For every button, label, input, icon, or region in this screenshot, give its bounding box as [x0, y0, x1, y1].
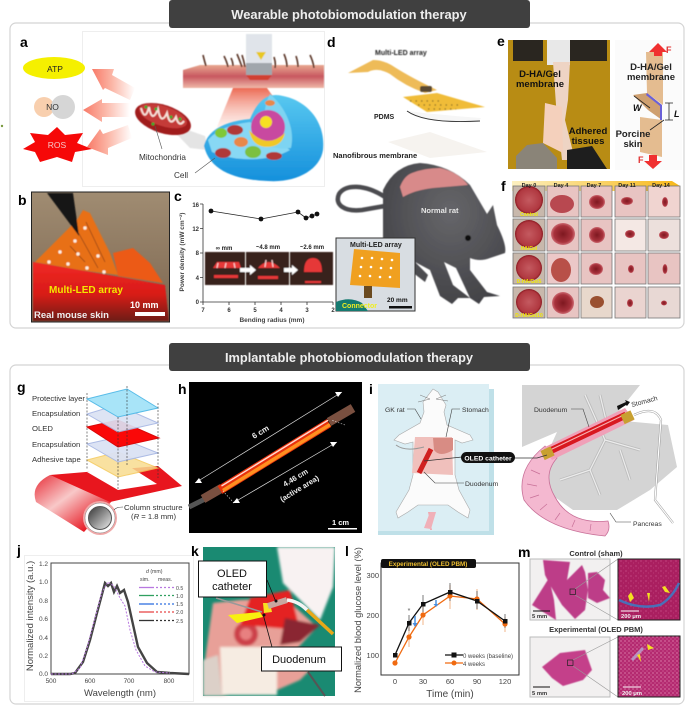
- chart: glucose: *: [408, 608, 411, 615]
- chart: spectrum: 1.0: [39, 579, 48, 586]
- legend: 4 weeks: [463, 662, 485, 668]
- callout: OLED catheter: OLED: [217, 568, 247, 580]
- photo: OLED catheter: (active area): [278, 473, 321, 504]
- legend: meas.: [158, 577, 172, 583]
- OLED layer diagram: [32, 386, 183, 535]
- panel label a: a: [20, 34, 28, 50]
- upper encapsulation: [87, 405, 158, 432]
- label: mitochondria: [139, 126, 186, 162]
- chart: spectrum: Normalized intensity (a.u.): [25, 561, 36, 671]
- chart: spectrum: 700: [124, 678, 135, 685]
- diagram e: membrane: [627, 72, 675, 83]
- duodenum illustration: [522, 385, 677, 536]
- lower encapsulation: [87, 437, 158, 462]
- chart: power density: ~4.8 mm: [256, 245, 280, 251]
- PDMS layer: [374, 111, 481, 122]
- wound photo grid: Day 0: [522, 183, 536, 189]
- panel label e: e: [497, 33, 505, 49]
- icon: ATP: [23, 57, 85, 79]
- chart: power density: Power density (mW cm⁻²): [179, 213, 186, 291]
- panel label h: h: [178, 381, 187, 397]
- title bar: implantable: Implantable photobiomodulation therapy: [225, 350, 474, 365]
- banner: Experimental (OLED PBM): [389, 561, 467, 568]
- chart: glucose: 100: [366, 651, 379, 660]
- chart: glucose: 90: [473, 677, 481, 686]
- chart: spectrum: 0.8: [39, 598, 48, 605]
- diagram e: D-HA/Gel: [630, 62, 672, 73]
- legend: 1.5: [176, 602, 183, 608]
- title bar: implantable: [169, 343, 530, 371]
- icon: ATP: ATP: [47, 64, 63, 74]
- chart: spectrum: 500: [46, 678, 57, 685]
- photo: surgery: [198, 547, 342, 696]
- panel label m: m: [518, 544, 530, 560]
- skin and light source: [183, 34, 324, 135]
- wound photo grid: Day 14: [652, 183, 671, 189]
- chart: glucose: 60: [446, 677, 454, 686]
- icon: cell: [165, 94, 323, 181]
- OLED layer diagram: Encapsulation: [32, 440, 80, 449]
- chart: glucose: Time (min): [426, 689, 474, 700]
- chart: power density: 16: [192, 203, 200, 209]
- photo: OLED catheter: 4.46 cm: [281, 467, 310, 489]
- histology panels: 200 μm: [621, 614, 641, 620]
- photo e: tissues: [572, 136, 604, 147]
- chart: spectrum: 0.0: [39, 671, 48, 678]
- chart: glucose: 0: [393, 677, 397, 686]
- duodenum illustration: Duodenum: [534, 407, 568, 414]
- labels: rat: Duodenum: [465, 481, 499, 488]
- diagram e: L: [674, 109, 680, 119]
- icon: ROS: ROS: [48, 140, 67, 150]
- wound photo grid: Day 4: [554, 183, 569, 189]
- chart: power density: 3: [305, 308, 309, 314]
- chart: power density: 2: [331, 308, 335, 314]
- icon: ROS: [23, 127, 92, 162]
- chart: spectrum: 0.2: [39, 653, 48, 660]
- experimental heading: Experimental (OLED PBM): [549, 625, 643, 634]
- panel label b: b: [18, 192, 27, 208]
- wound photo grid: D-HA/Gel5: [517, 279, 542, 285]
- chart: power density: 4: [196, 276, 200, 282]
- scale bar: 10 mm: [130, 300, 159, 310]
- diagram e: W: [633, 103, 643, 113]
- chart: power density: 6: [227, 308, 231, 314]
- histology panels: 5 mm: [532, 614, 547, 620]
- panel label i: i: [369, 381, 373, 397]
- chart: power density: 4: [279, 308, 283, 314]
- chart: power density: 0: [196, 300, 200, 306]
- callout: OLED catheter: [424, 452, 547, 463]
- panel label g: g: [17, 379, 26, 395]
- inset: multi-LED array: [336, 238, 415, 311]
- chart: glucose: Normalized blood glucose level (%): [353, 547, 363, 693]
- callout: OLED catheter: catheter: [212, 581, 252, 593]
- callout: OLED catheter: OLED catheter: [464, 456, 512, 462]
- chart: power density: 8: [196, 251, 200, 257]
- arrows to outcomes: [83, 69, 135, 155]
- legend: [445, 652, 513, 668]
- label: mitochondria: Mitochondria: [139, 153, 186, 162]
- text: normal rat: Normal rat: [421, 206, 459, 215]
- chart: glucose: 120: [499, 677, 511, 686]
- rat abdomen illustration: [378, 384, 499, 535]
- inset photos: [205, 252, 333, 285]
- scale bar: [328, 518, 357, 530]
- OLED layer: [87, 420, 159, 447]
- scale bar: 20 mm: [387, 297, 408, 304]
- histology panels: 5 mm: [532, 691, 547, 697]
- scale bar: 1 cm: [332, 518, 349, 527]
- legend: 2.5: [176, 619, 183, 625]
- label: column structure: Column structure: [124, 503, 183, 512]
- panel label f: f: [501, 178, 506, 194]
- chart: glucose: 30: [419, 677, 427, 686]
- photo e: Adhered: [569, 126, 607, 137]
- control heading: Control (sham): [569, 549, 623, 558]
- panel: wearable therapy: [10, 23, 684, 328]
- panel label c: c: [174, 188, 182, 204]
- callout: duodenum: Duodenum: [272, 654, 326, 666]
- title bar: wearable: Wearable photobiomodulation therapy: [231, 7, 468, 22]
- decorative dot: [1, 125, 3, 127]
- legend: d (mm): [146, 569, 163, 575]
- chart: power density: ∞ mm: [216, 246, 232, 252]
- protective layer: [87, 389, 158, 417]
- label: cell: Cell: [174, 171, 188, 180]
- OLED layer diagram: OLED: [32, 424, 53, 433]
- nanofibrous membrane: [333, 132, 487, 160]
- legend: 0.5: [176, 586, 183, 592]
- chart: power density: 12: [192, 227, 200, 233]
- icon: NO: [34, 95, 75, 119]
- legend: 1.0: [176, 594, 183, 600]
- chart: power density: 7: [201, 308, 205, 314]
- diagram e: skin: [623, 139, 643, 150]
- chart: spectrum: 0.6: [39, 616, 48, 623]
- nanofibrous membrane: Nanofibrous membrane: [333, 151, 417, 160]
- chart: power density: 5: [253, 308, 257, 314]
- chart: power density: ~2.6 mm: [300, 245, 324, 251]
- label: cell: [174, 158, 215, 180]
- wound photo grid: [512, 181, 680, 319]
- photo: OLED catheter: [189, 382, 362, 533]
- text: Multi-LED array: Multi-LED array: [49, 285, 123, 296]
- OLED layer diagram: Encapsulation: [32, 409, 80, 418]
- chart: spectrum: 800: [164, 678, 175, 685]
- chart: spectrum: 0.4: [39, 635, 48, 642]
- icon: mitochondria: [131, 97, 195, 141]
- labels: rat: Stomach: [462, 407, 489, 414]
- diagram e: F: [666, 45, 672, 55]
- chart: power density: [179, 203, 335, 324]
- panel label d: d: [327, 34, 336, 50]
- wound photo grid: D-HA/Gel10: [515, 313, 543, 319]
- photo: OLED catheter: 6 cm: [250, 424, 271, 441]
- photo e: D-HA/Gel: [519, 69, 561, 80]
- title bar: wearable: [169, 0, 530, 28]
- chart: glucose: 200: [366, 611, 379, 620]
- diagram e: Porcine: [616, 129, 650, 140]
- label: column structure: (R = 1.8 mm): [131, 512, 177, 521]
- wound photo grid: Day 11: [618, 183, 636, 189]
- duodenum illustration: Pancreas: [633, 521, 662, 528]
- chart: spectrum: 1.2: [39, 561, 48, 568]
- photo b: [32, 192, 170, 322]
- chart: spectrum: Wavelength (nm): [84, 688, 156, 699]
- histology panels: 200 μm: [622, 691, 642, 697]
- wound photo grid: HA/Gel: [521, 246, 538, 252]
- chart: power density: Bending radius (mm): [239, 317, 305, 324]
- OLED layer diagram: Protective layer: [32, 394, 85, 403]
- text: real mouse skin: Real mouse skin: [34, 310, 109, 321]
- connector label: Connector: [342, 303, 377, 310]
- ribbon multi-LED array: [348, 50, 485, 112]
- callout: duodenum: [262, 647, 342, 671]
- panel label j: j: [16, 542, 21, 558]
- ribbon multi-LED array: Multi-LED array: [375, 50, 427, 57]
- histology panels: [530, 549, 680, 697]
- panel label k: k: [191, 543, 199, 559]
- chart: spectrum: 600: [85, 678, 96, 685]
- adhesive layer: [87, 452, 158, 477]
- text: Multi-LED array: [350, 242, 402, 249]
- legend: 2.0: [176, 610, 183, 616]
- legend: 0 weeks (baseline): [463, 654, 513, 660]
- wound photo grid: Control: [520, 212, 538, 218]
- chart: glucose: [353, 547, 519, 700]
- duodenum illustration: Stomach: [631, 395, 659, 409]
- chart: spectrum: [24, 556, 194, 702]
- legend: sim.: [140, 577, 150, 583]
- illustration: rat: [338, 163, 505, 304]
- callout: OLED catheter: [198, 561, 266, 597]
- timeline chevron: [512, 181, 680, 191]
- photo e: [508, 40, 610, 169]
- diagram e: [615, 40, 682, 170]
- label: column structure: [114, 503, 183, 521]
- diagram e: F: [638, 155, 644, 165]
- PDMS layer: PDMS: [374, 114, 395, 121]
- panel label l: l: [345, 543, 349, 559]
- panel: implantable therapy: [10, 365, 684, 704]
- panel: a background: [82, 32, 324, 186]
- labels: rat: GK rat: [385, 407, 405, 414]
- banner: [381, 559, 476, 568]
- photo e: membrane: [516, 79, 564, 90]
- OLED layer diagram: Adhesive tape: [32, 455, 81, 464]
- wound photo grid: Day 7: [587, 183, 601, 189]
- legend: [140, 569, 183, 625]
- icon: NO: NO: [46, 102, 59, 112]
- labels: rat: [385, 407, 499, 488]
- chart: glucose: 300: [366, 571, 379, 580]
